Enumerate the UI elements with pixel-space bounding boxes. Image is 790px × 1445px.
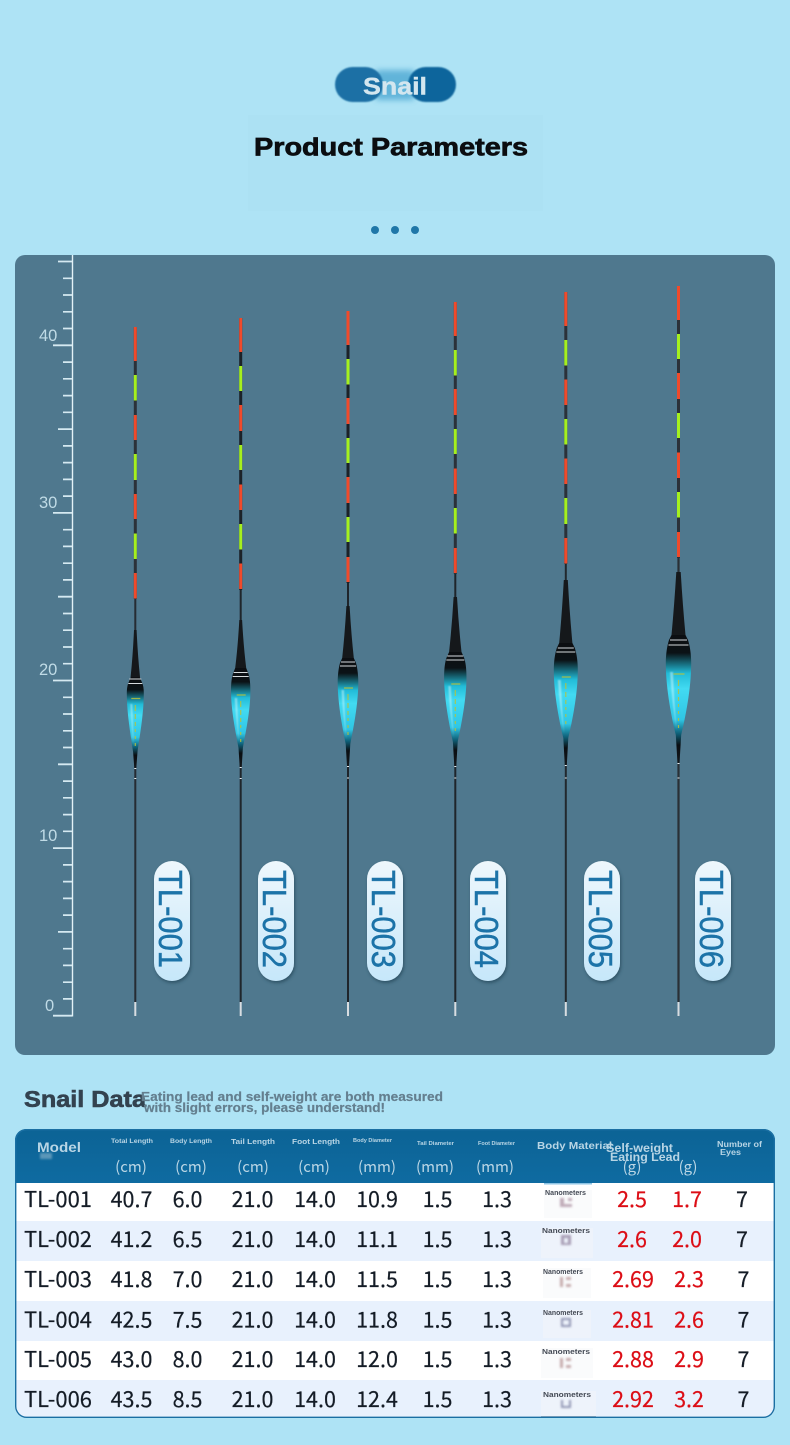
row: TL-005 [24,1343,749,1374]
ruler numbers: 20 [39,661,57,679]
float: TL-006 [666,286,691,1016]
row: TL-006: 8.5 [173,1383,202,1414]
table header: Body Diameter [353,1138,393,1144]
row: TL-005: 1.5 [423,1343,452,1374]
row: TL-002: Nanometers [542,1228,590,1235]
ruler [39,255,72,1016]
row: TL-005: 2.88 [612,1343,654,1374]
row: TL-006: 1.5 [423,1383,452,1414]
row: TL-003: 14.0 [294,1263,336,1294]
label: TL-003: TL-003 [365,870,402,968]
row: TL-006: 1.3 [482,1383,512,1414]
row: TL-004: 42.5 [111,1304,152,1334]
row: TL-001: 40.7 [111,1183,152,1214]
table header: Body Length [170,1138,212,1145]
row: TL-001: 7 [736,1183,748,1214]
badge: Snail: Snail [363,74,427,100]
note: measurement errors: Eating lead and self-weight are both measured [141,1090,443,1104]
row: TL-001: 10.9 [356,1183,398,1214]
table header: Eyes [720,1147,741,1157]
row: TL-005: Nanometers [542,1349,590,1356]
table header: Foot Diameter [478,1141,516,1147]
float: TL-001 [127,327,144,1016]
table header: Tail Length [231,1137,275,1146]
row: TL-002: 1.5 [423,1223,452,1254]
row: TL-003: 7 [738,1263,749,1294]
row: TL-003: 2.69 [612,1263,654,1294]
row: TL-004: 7 [738,1304,749,1334]
row: TL-006: 12.4 [356,1383,398,1414]
row: TL-001 [24,1183,748,1214]
row: TL-001: 6.0 [173,1183,202,1214]
ruler numbers: 30 [39,494,57,512]
note: measurement errors: with slight errors, please understand! [143,1101,385,1115]
label: TL-004: TL-004 [468,870,505,968]
table header: (mm) [358,1156,396,1177]
float: TL-002 [231,318,250,1016]
row: TL-002: 2.0 [672,1223,702,1254]
float: TL-005 [554,292,578,1016]
row: TL-004: TL-004 [24,1304,92,1334]
table header: Eating Lead [610,1150,680,1164]
row: TL-006: 43.5 [111,1383,152,1414]
label: TL-001: TL-001 [152,870,189,968]
table header: Total Length [111,1138,153,1145]
row: TL-002: TL-002 [24,1223,92,1254]
label: TL-006: TL-006 [693,870,730,968]
label: TL-005: TL-005 [582,870,619,968]
row: TL-003: 1.3 [482,1263,512,1294]
row: TL-003: TL-003 [24,1263,92,1294]
row: TL-003: Nanometers [543,1269,583,1276]
row: TL-002: 7 [736,1223,748,1254]
heading: Snail Data: Snail Data [24,1086,146,1112]
row: TL-004: 14.0 [294,1304,336,1334]
title panel [248,115,543,211]
table header: (cm) [115,1156,147,1177]
panel: float size chart [15,255,775,1055]
ruler numbers: 10 [39,827,57,845]
table header: (g) [679,1156,697,1177]
row: TL-005: TL-005 [24,1343,92,1374]
row: TL-001: Nanometers [545,1190,586,1197]
row: TL-001: TL-001 [24,1183,92,1214]
table header: Self-weight [606,1141,673,1155]
float: TL-004 [444,302,466,1016]
float: TL-003 [338,311,358,1016]
row: TL-005: 43.0 [111,1343,152,1374]
row: TL-002: 41.2 [111,1223,152,1254]
row: TL-006: 2.92 [612,1383,654,1414]
row: TL-005: 2.9 [674,1343,704,1374]
three dots [371,226,419,234]
heading: Product Parameters: Product Parameters [254,134,528,162]
row: TL-001: 1.7 [672,1183,702,1214]
table header: (cm) [237,1156,269,1177]
row: TL-004: 21.0 [232,1304,273,1334]
row: TL-001: 21.0 [232,1183,273,1214]
table header: Tail Diameter [417,1141,455,1147]
row: TL-002: 21.0 [232,1223,273,1254]
data table [15,1129,775,1418]
row: TL-004 [24,1304,749,1334]
row: TL-003: 41.8 [111,1263,152,1294]
row: TL-005: 1.3 [482,1343,512,1374]
row: TL-003: 7.0 [173,1263,202,1294]
table header: (cm) [175,1156,207,1177]
row: TL-005: 21.0 [232,1343,273,1374]
row: TL-006: 14.0 [294,1383,336,1414]
table header: Model [37,1139,81,1155]
row: TL-006: 3.2 [674,1383,704,1414]
row: TL-006: 7 [738,1383,749,1414]
table header: (g) [623,1156,641,1177]
row: TL-004: Nanometers [543,1310,583,1317]
row: TL-003 [24,1263,749,1294]
row: TL-006 [24,1383,749,1414]
note: measurement errors [141,1090,443,1115]
row: TL-004: 2.81 [612,1304,654,1334]
row: TL-005: 12.0 [356,1343,398,1374]
row: TL-004: 11.8 [356,1304,398,1334]
row: TL-003: 2.3 [674,1263,704,1294]
row: TL-006: Nanometers [543,1392,591,1399]
row: TL-001: 1.3 [482,1183,512,1214]
row: TL-003: 1.5 [423,1263,452,1294]
badge: Snail [335,67,456,102]
table header: (cm) [298,1156,330,1177]
material swatches [541,1190,596,1416]
row: TL-005: 14.0 [294,1343,336,1374]
table header: (mm) [416,1156,454,1177]
row: TL-002 [24,1223,748,1254]
row: TL-001: 2.5 [617,1183,647,1214]
ruler numbers: 0 [45,997,54,1015]
row: TL-005: 7 [738,1343,749,1374]
row: TL-002: 2.6 [617,1223,647,1254]
label: TL-002: TL-002 [256,870,293,968]
row: TL-002: 6.5 [173,1223,202,1254]
row: TL-004: 7.5 [173,1304,202,1334]
row: TL-004: 2.6 [674,1304,704,1334]
ruler numbers [39,327,57,1015]
row: TL-006: 21.0 [232,1383,273,1414]
table header [37,1137,762,1177]
row: TL-004: 1.5 [423,1304,452,1334]
table header: Body Material [537,1141,612,1152]
row: TL-006: TL-006 [24,1383,92,1414]
row: TL-005: 8.0 [173,1343,202,1374]
row: TL-002: 11.1 [356,1223,398,1254]
row: TL-001: 1.5 [423,1183,452,1214]
row: TL-001: 14.0 [294,1183,336,1214]
table header: Foot Length [292,1137,340,1146]
row: TL-003: 21.0 [232,1263,273,1294]
ruler numbers: 40 [39,327,57,345]
table header: (mm) [476,1156,514,1177]
row: TL-002: 1.3 [482,1223,512,1254]
row: TL-002: 14.0 [294,1223,336,1254]
table header: Number of [717,1139,762,1149]
row: TL-003: 11.5 [356,1263,398,1294]
row: TL-004: 1.3 [482,1304,512,1334]
